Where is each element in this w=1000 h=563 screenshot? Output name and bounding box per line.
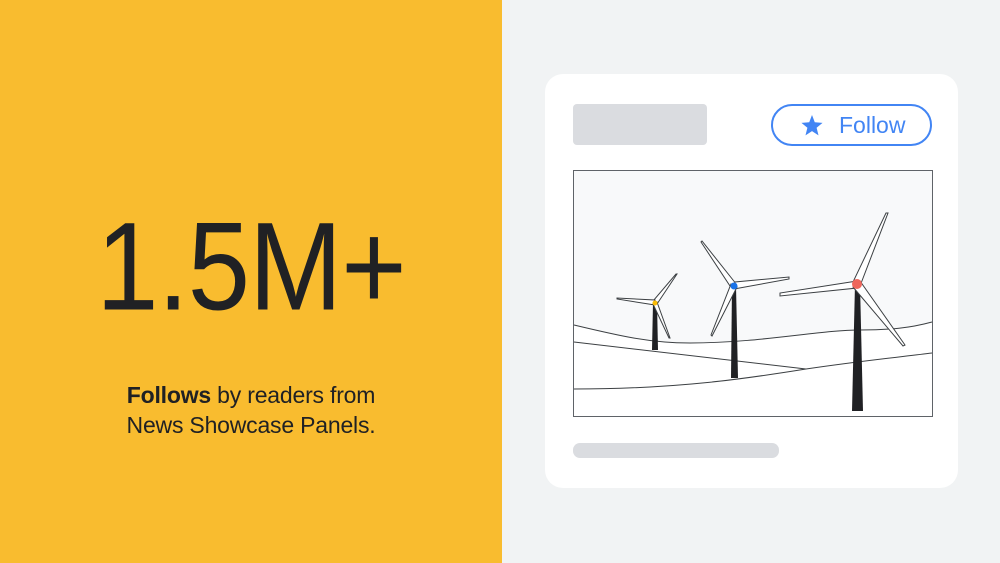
big number: 1.5M+	[96, 196, 406, 336]
follow button: Follow	[839, 112, 905, 138]
panel: news card	[545, 74, 958, 488]
panel: yellow stat panel	[0, 0, 502, 563]
turbine large	[780, 213, 905, 411]
follow button	[771, 104, 932, 146]
turbine middle	[701, 241, 789, 378]
description text: Follows by readers from	[127, 382, 375, 408]
title placeholder bar	[573, 104, 707, 145]
description text: News Showcase Panels.	[127, 412, 375, 438]
bottom placeholder bar	[573, 443, 779, 458]
description text	[127, 382, 375, 438]
turbine small	[617, 274, 677, 350]
icon: star	[802, 115, 822, 136]
